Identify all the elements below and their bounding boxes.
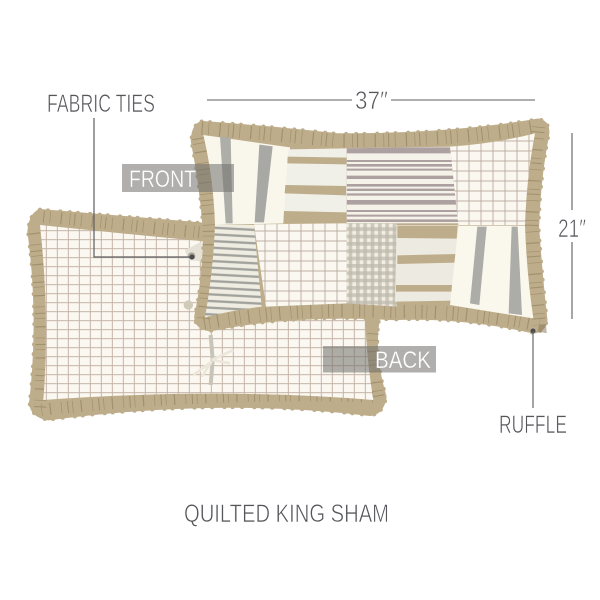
- dimension: width 37 inches: 37″: [355, 87, 388, 115]
- label: back: BACK: [375, 347, 431, 374]
- label: front: FRONT: [129, 166, 196, 193]
- back pillow: [28, 210, 386, 419]
- front ruffle: [192, 119, 549, 333]
- back ruffle: [28, 210, 386, 419]
- fabric tie bow: [193, 335, 233, 385]
- front patch 6: check: [254, 223, 347, 307]
- callout: fabric ties: [47, 90, 194, 260]
- front patch 3: purple-grey stripes: [345, 145, 460, 225]
- callout: ruffle: [499, 328, 567, 439]
- dimension: height 21 inches: 21″: [558, 215, 586, 243]
- label: front: [122, 164, 234, 193]
- front patch 8: tan stripes: [395, 225, 458, 302]
- front patch 4: check: [450, 133, 535, 225]
- back check fabric: [40, 225, 373, 400]
- fabric tie top: [185, 242, 203, 262]
- front patch 9: cream with grey stripes: [450, 226, 533, 318]
- front pillow: [192, 119, 549, 333]
- callout: ruffle: RUFFLE: [499, 411, 567, 439]
- front patch 5: grey stripes: [205, 225, 262, 317]
- fabric tie middle: [184, 300, 193, 310]
- front patch 7: gingham: [347, 223, 397, 307]
- front patch 1: cream with grey stripes: [203, 135, 290, 225]
- caption: QUILTED KING SHAM: [184, 500, 389, 528]
- callout: fabric ties: FABRIC TIES: [47, 90, 155, 118]
- front patch 2: tan stripes: [283, 148, 347, 223]
- label: back: [323, 346, 436, 374]
